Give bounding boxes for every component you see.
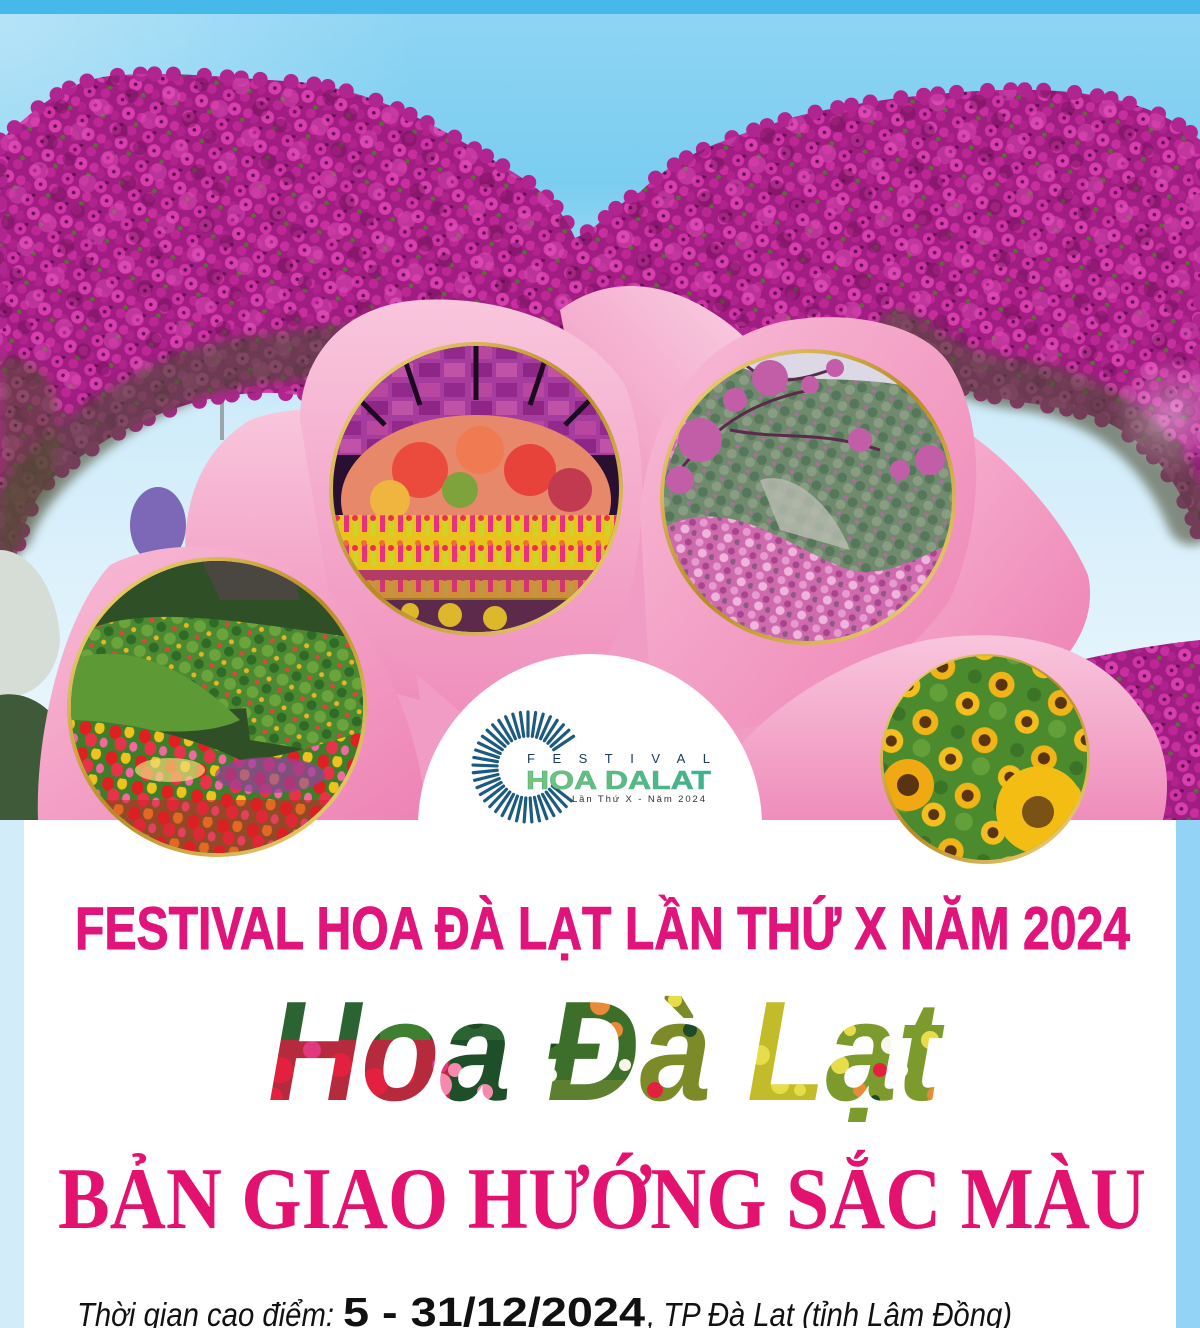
petal: centre left [300,300,642,727]
lower left foliage [0,487,186,820]
background sky [0,0,1200,830]
side margins [0,820,1200,1328]
flower-filled script title: Hoa Đà Lạt [268,972,945,1131]
photo: festival stage [329,342,623,636]
petal: top centre [560,286,780,520]
petal: far right [860,400,1090,680]
photo: cherry blossom hills [660,349,960,650]
petal: base fill [370,340,820,820]
logo edition line: Lần Thứ X - Năm 2024 [572,794,705,805]
lens flare [1100,345,1200,485]
petal: lower right [740,635,1167,820]
logo ray ring [473,712,574,822]
pink petals fan [38,286,1167,820]
logo word HOA DALAT: HOA DALAT [526,765,711,795]
petal: far left [185,410,420,700]
petal: centre right [640,317,976,730]
photo: sunflowers [880,654,1090,865]
lower right foliage [1060,640,1200,820]
flower arch [0,74,1200,565]
lamp post [206,395,240,440]
logo badge [24,654,1176,998]
petal: lower left [38,547,425,820]
photo: tulip garden [67,557,370,860]
logo word FESTIVAL: FESTIVAL [527,751,710,766]
white info panel [24,820,1176,1328]
arch inner foliage [8,335,1192,530]
date and place line [77,1289,1012,1328]
dangling flower clusters [0,358,60,565]
